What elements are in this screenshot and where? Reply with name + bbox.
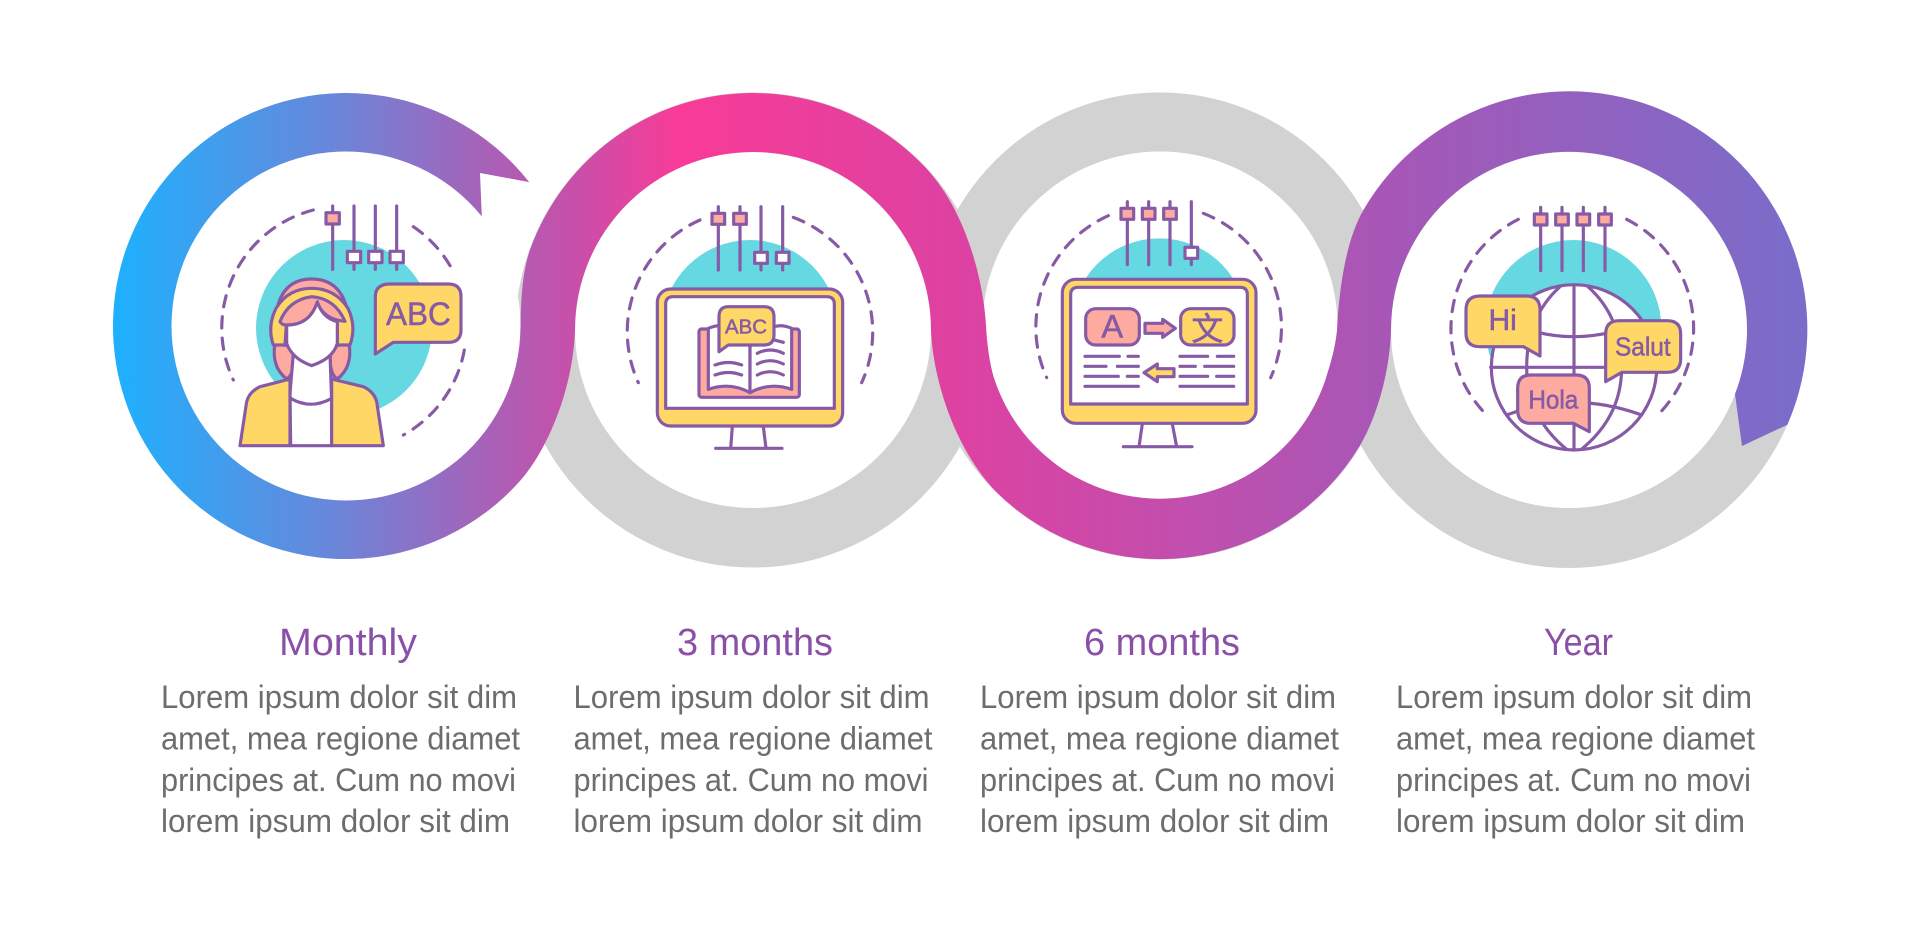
body copy: principes at. Cum no movi (1396, 762, 1751, 798)
body copy: principes at. Cum no movi (574, 762, 928, 798)
body copy: principes at. Cum no movi (161, 762, 516, 798)
heading: Monthly (279, 622, 417, 664)
icon: translation on monitor (1036, 202, 1281, 447)
body copy: lorem ipsum dolor sit dim (574, 803, 922, 839)
text block: Year (1396, 622, 1755, 839)
heading: 3 months (677, 622, 833, 664)
body copy: amet, mea regione diamet (980, 720, 1339, 756)
teal backdrop (1485, 240, 1661, 416)
source letter A: A (1101, 307, 1123, 344)
bubble Hi (1466, 296, 1540, 356)
body copy: Lorem ipsum dolor sit dim (980, 679, 1336, 715)
bubble Hola: Hola (1528, 384, 1579, 414)
arrow right (1145, 319, 1175, 337)
body copy: Lorem ipsum dolor sit dim (1396, 679, 1752, 715)
grey ring: step 2 (546, 122, 960, 538)
heading: Year (1544, 622, 1613, 664)
icon: interpreter with headphones (222, 206, 464, 446)
globe (1491, 285, 1657, 450)
slider controls (1121, 202, 1198, 265)
grey ring: step 4 (1361, 122, 1777, 538)
body copy: amet, mea regione diamet (1396, 720, 1755, 756)
bubble Salut (1606, 321, 1681, 382)
dashed orbit (1036, 213, 1281, 378)
body copy: Lorem ipsum dolor sit dim (161, 679, 517, 715)
teal backdrop (662, 240, 838, 416)
slider controls (712, 207, 789, 270)
speech bubble ABC (719, 307, 774, 352)
dashed orbit (627, 217, 873, 383)
text block: 6 months (980, 622, 1339, 839)
body copy (574, 679, 933, 839)
bubble Hola (1518, 375, 1589, 432)
dashed orbit (222, 210, 464, 435)
dashed orbit (1451, 219, 1694, 417)
text block: 3 months (574, 622, 933, 839)
gradient serpentine ribbon with arrow ends (113, 91, 1807, 559)
bubble Hi: Hi (1489, 304, 1517, 337)
white discs (172, 152, 1747, 508)
woman figure (240, 279, 383, 446)
teal backdrop (256, 240, 432, 416)
body copy: principes at. Cum no movi (980, 762, 1335, 798)
text block: Monthly (161, 622, 520, 839)
target character: 文 (1191, 311, 1223, 347)
slider controls (1534, 207, 1611, 271)
speech bubble ABC: ABC (386, 296, 451, 332)
body copy: Lorem ipsum dolor sit dim (574, 679, 930, 715)
arrow left (1144, 364, 1174, 382)
speech bubble ABC: ABC (725, 315, 767, 338)
icon: book on monitor (627, 207, 873, 448)
text lines (1085, 356, 1234, 386)
grey ring: step 3 (956, 122, 1364, 530)
body copy: lorem ipsum dolor sit dim (1396, 803, 1745, 839)
source letter A (1086, 307, 1139, 345)
open book (699, 326, 799, 397)
body copy: lorem ipsum dolor sit dim (980, 803, 1329, 839)
slider controls (326, 206, 403, 269)
speech bubble ABC (375, 284, 461, 354)
teal backdrop (1071, 238, 1247, 414)
heading: 6 months (1084, 622, 1240, 664)
icon: globe with greetings (1451, 207, 1694, 450)
body copy: amet, mea regione diamet (161, 720, 520, 756)
target character (1181, 309, 1234, 347)
body copy (161, 679, 520, 839)
monitor (657, 289, 843, 448)
monitor (1062, 279, 1256, 447)
body copy: lorem ipsum dolor sit dim (161, 803, 510, 839)
body copy (980, 679, 1339, 839)
bubble Salut: Salut (1615, 332, 1671, 362)
body copy (1396, 679, 1755, 839)
body copy: amet, mea regione diamet (574, 720, 933, 756)
